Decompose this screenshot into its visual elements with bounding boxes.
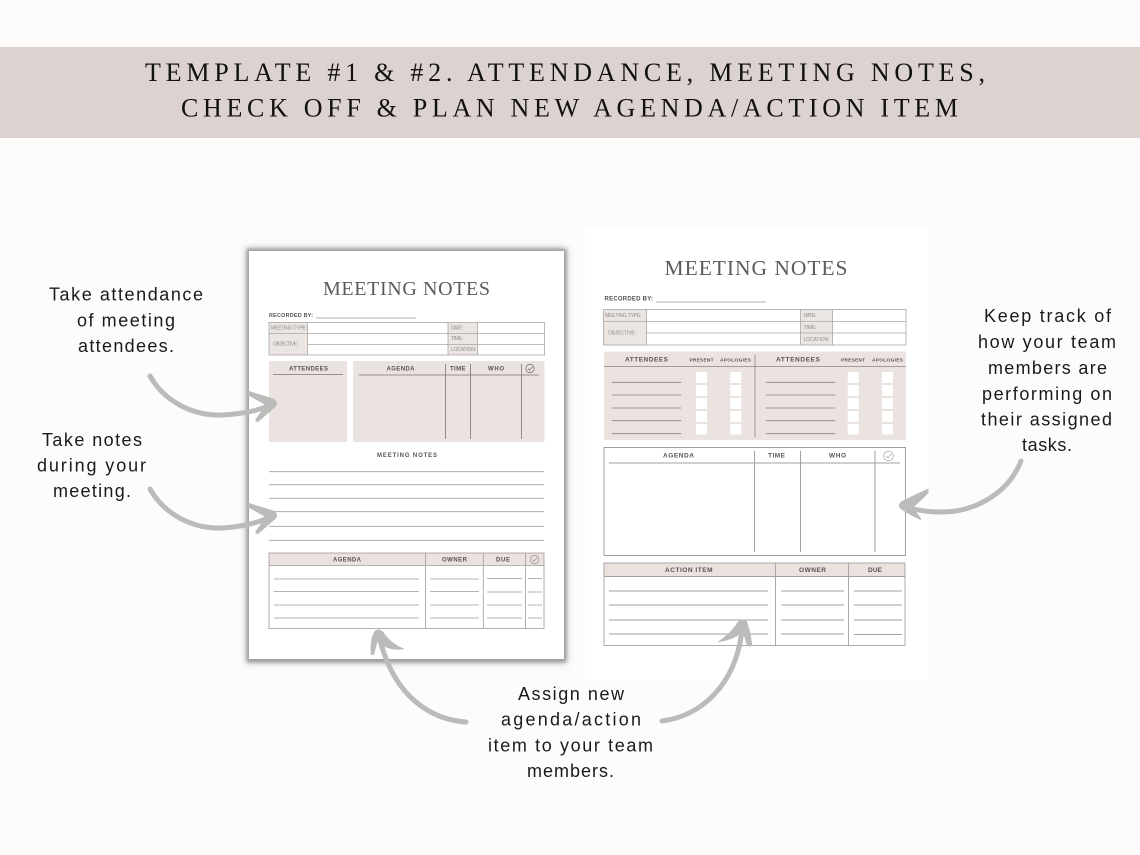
callout: keep track: Keep track of: [984, 306, 1112, 326]
arrow: assign to action item table: [662, 620, 752, 721]
header banner: CHECK OFF & PLAN NEW AGENDA/ACTION ITEM: [181, 94, 958, 122]
template 1 agenda owner due table: [269, 553, 544, 628]
template 2 agenda table: TIME: [768, 452, 786, 460]
template 2 agenda table: WHO: [829, 452, 846, 460]
template 1 agenda owner due table: DUE: [496, 558, 510, 564]
template 1 meeting details table: [269, 322, 544, 355]
callout: take notes: [37, 430, 146, 501]
template 2 action item table: DUE: [868, 567, 883, 574]
template 1 attendees panel: ATTENDEES: [289, 366, 328, 372]
template 1 meeting notes lines: MEETING NOTES: [377, 453, 437, 459]
template 2 meeting details table: MEETING TYPE:: [605, 313, 642, 319]
callout: assign new agenda/action item: agenda/action: [501, 710, 641, 730]
callout: take attendance: [49, 284, 203, 356]
callout: keep track: [978, 306, 1116, 455]
template 1 recorded by: RECORDED BY:: [269, 313, 313, 319]
header banner: [0, 47, 1140, 138]
callout: take notes: during your: [37, 456, 146, 476]
template 1 title: MEETING NOTES: [323, 278, 490, 300]
template 2 action item table: OWNER: [799, 567, 826, 574]
template 1 agenda owner due table: AGENDA: [333, 558, 362, 564]
callout: keep track: tasks.: [1022, 435, 1072, 455]
template 2 attendees panel: [604, 352, 906, 440]
arrow: assign to agenda table: [371, 630, 466, 722]
callout: take notes: Take notes: [42, 430, 142, 450]
template 2 meeting details table: LOCATION:: [804, 337, 830, 343]
callout: take notes: meeting.: [53, 481, 131, 501]
template 2 meeting details table: OBJECTIVE:: [608, 330, 636, 336]
template 2 meeting details table: [604, 310, 906, 345]
template 2 attendees panel: APOLOGIES: [720, 358, 752, 364]
template 2 meeting details table: DATE:: [804, 313, 816, 319]
template 1 meeting details table: DATE:: [451, 326, 463, 332]
template 1 agenda owner due table: OWNER: [442, 558, 468, 564]
header banner: TEMPLATE #1 & #2. ATTENDANCE, MEETING NOTES,: [145, 58, 985, 87]
callout: assign new agenda/action item: [488, 684, 653, 781]
template 2 attendees panel: ATTENDEES: [625, 356, 669, 364]
template 1 meeting details table: MEETING TYPE:: [271, 326, 307, 332]
callout: take attendance: attendees.: [78, 336, 174, 356]
callout: take attendance: Take attendance: [49, 284, 203, 304]
template 2 recorded by: RECORDED BY:: [604, 296, 653, 302]
template 1 agenda panel: TIME: [450, 366, 466, 372]
template 1 agenda panel: AGENDA: [386, 366, 415, 372]
template 2 agenda table: [604, 448, 906, 556]
arrow: keep track to agenda table: [899, 461, 1021, 520]
template 1 meeting details table: LOCATION:: [451, 347, 476, 353]
callout: assign new agenda/action item: item to your team: [488, 736, 653, 756]
template 2 meeting details table: TIME:: [804, 325, 816, 331]
callout: keep track: how your team: [978, 332, 1116, 352]
arrow: attendance to attendees panel: [150, 376, 277, 422]
template 2 attendees panel: ATTENDEES: [776, 356, 821, 364]
template 1 agenda panel: WHO: [488, 366, 504, 372]
panel: template 2 page: [585, 228, 928, 680]
template 1 attendees panel: [269, 361, 347, 442]
template 2 action item table: ACTION ITEM: [665, 567, 712, 574]
template 2 agenda table: AGENDA: [663, 452, 694, 460]
template 1 meeting details table: OBJECTIVE:: [273, 342, 298, 348]
template 2 action item table: [604, 563, 905, 646]
arrow: notes to meeting notes lines: [150, 489, 277, 534]
template 2 title: MEETING NOTES: [664, 256, 848, 280]
template 2 attendees panel: PRESENT: [690, 358, 714, 364]
callout: assign new agenda/action item: Assign new: [518, 684, 625, 704]
callout: keep track: performing on: [982, 384, 1112, 404]
template 1 meeting details table: TIME:: [451, 336, 463, 342]
callout: keep track: members are: [988, 358, 1107, 378]
template 2 attendees panel: PRESENT: [841, 358, 865, 364]
callout: keep track: their assigned: [981, 410, 1112, 430]
callout: take attendance: of meeting: [77, 310, 175, 330]
template 1 agenda panel: [353, 361, 544, 442]
template 2 attendees panel: APOLOGIES: [872, 358, 904, 364]
callout: assign new agenda/action item: members.: [527, 761, 614, 781]
panel: template 1 page: [246, 248, 567, 663]
